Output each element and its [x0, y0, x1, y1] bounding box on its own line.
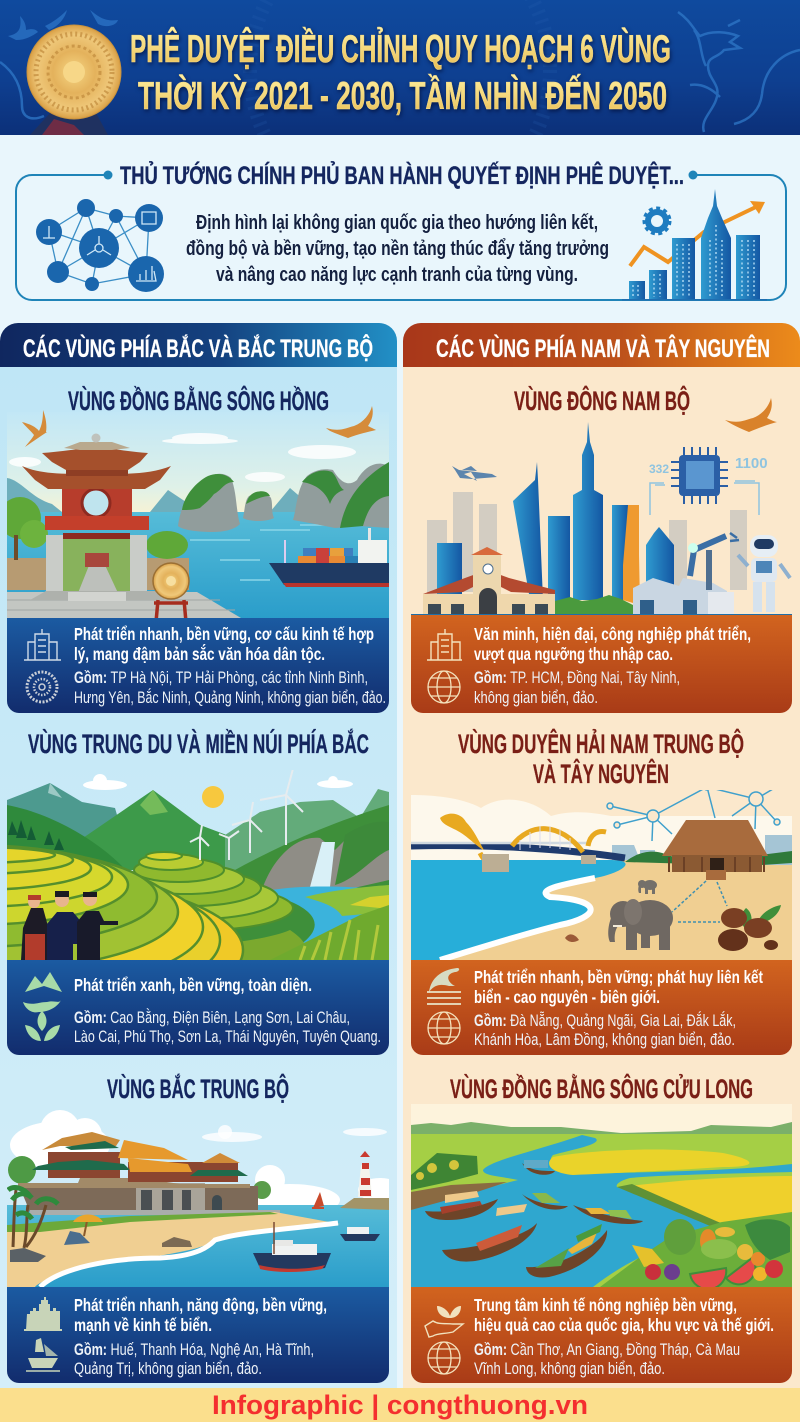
- intro text: Định hình lại không gian quốc gia theo hướng liên kết,: [196, 212, 598, 234]
- illustration: midlands: [7, 770, 389, 960]
- heading: Red River: VÙNG ĐỒNG BẰNG SÔNG HỒNG: [68, 385, 329, 416]
- icon: globe: [428, 671, 460, 703]
- text: [74, 1295, 327, 1378]
- rice terraces mound: [133, 851, 294, 930]
- illustration: Southeast city: [411, 422, 792, 616]
- info panel: Red River: [7, 618, 389, 713]
- icon: citadel: [24, 1297, 62, 1331]
- icon: leaves: [25, 1011, 60, 1041]
- info panel: north central: [7, 1287, 389, 1383]
- icon: bronze drum: [27, 25, 121, 135]
- text: lý, mang đậm bản sắc văn hóa dân tộc.: [74, 643, 325, 664]
- text: Hưng Yên, Bắc Ninh, Quảng Ninh, không gian biển, đảo.: [74, 688, 386, 707]
- illustration: Red River delta: [7, 428, 389, 618]
- factory: [633, 533, 739, 615]
- header banner: [0, 0, 800, 135]
- icon: birds: [22, 406, 376, 447]
- footer: [0, 1388, 800, 1422]
- boat large: [253, 1222, 331, 1272]
- icon: lighthouse ship: [26, 1338, 60, 1371]
- panel: intro: [16, 160, 786, 300]
- text: Quảng Trị, không gian biển, đảo.: [74, 1359, 262, 1378]
- icon: bird: [725, 398, 777, 432]
- heading: Southeast: VÙNG ĐÔNG NAM BỘ: [514, 385, 690, 416]
- stilt house: [662, 820, 768, 880]
- coffee beans: [718, 905, 781, 951]
- icon: microchip: 1100: [735, 455, 768, 472]
- boats: [425, 1163, 643, 1278]
- palm trees: [8, 1188, 58, 1248]
- icon: birds: [8, 10, 118, 40]
- heading: South Central: [458, 727, 744, 789]
- yellow field: [549, 1150, 749, 1175]
- icon: faint dragon: [0, 12, 800, 132]
- text: [474, 967, 763, 1049]
- icon: network: [36, 199, 164, 292]
- river: [411, 1135, 792, 1287]
- robot: [738, 535, 790, 612]
- bronze drum stand: [153, 563, 189, 622]
- illustration: north central: [7, 1110, 402, 1287]
- panel: southern column: [403, 323, 800, 1388]
- text: vượt qua ngưỡng thu nhập cao.: [474, 644, 673, 664]
- text: biển - cao nguyên - biên giới.: [474, 987, 660, 1007]
- column heading north: CÁC VÙNG PHÍA BẮC VÀ BẮC TRUNG BỘ: [23, 333, 373, 363]
- info panel: Mekong: [411, 1287, 792, 1383]
- title: [130, 27, 671, 118]
- icon: microchip: [649, 447, 768, 515]
- icon: wave: [427, 968, 461, 1004]
- info panel: Southeast: [411, 615, 792, 713]
- column heading south: [403, 323, 800, 367]
- golden field: [630, 1176, 792, 1224]
- icon: globe: [428, 1012, 460, 1044]
- text: Phát triển nhanh, năng động, bền vững,: [74, 1295, 327, 1315]
- icon: mountains hand: [23, 972, 62, 1012]
- temple gate: [0, 434, 189, 601]
- lighthouse: [340, 1151, 389, 1210]
- text: không gian biển, đảo.: [474, 688, 598, 707]
- text: Phát triển xanh, bền vững, toàn diện.: [74, 975, 312, 995]
- network lines: [606, 790, 781, 841]
- people: [21, 891, 118, 960]
- heading: South Central: VÀ TÂY NGUYÊN: [533, 758, 669, 789]
- info panel: midlands: [7, 960, 389, 1055]
- market building: [423, 547, 555, 615]
- icon: plant in hand: [425, 1306, 463, 1337]
- icon: globe: [428, 1342, 460, 1374]
- icon: city growth: [622, 189, 767, 300]
- text: [74, 975, 381, 1046]
- intro text: và nâng cao năng lực cạnh tranh của từng vùng.: [216, 264, 578, 286]
- illustration: Mekong delta: [411, 1104, 792, 1289]
- panel: northern column: [0, 323, 402, 1388]
- elephant small: [638, 880, 657, 894]
- beach umbrella: [64, 1214, 103, 1245]
- icon: microchip: 332: [649, 462, 669, 476]
- text: Phát triển nhanh, bền vững, cơ cấu kinh tế hợp: [74, 624, 374, 644]
- column heading north: [0, 323, 397, 367]
- heading: north central: VÙNG BẮC TRUNG BỘ: [107, 1073, 289, 1104]
- info panel: South Central: [411, 960, 792, 1055]
- citadel: [18, 1132, 258, 1212]
- boat small: [340, 1227, 380, 1241]
- text: [474, 1295, 774, 1378]
- footer: Infographic | congthuong.vn: [212, 1390, 588, 1420]
- limestone islands: [178, 462, 389, 532]
- text: Gồm: TP Hà Nội, TP Hải Phòng, các tỉnh Ninh Bình,: [74, 668, 368, 687]
- text: [474, 624, 751, 707]
- icon: buildings: [24, 629, 61, 660]
- cargo ship: [269, 528, 389, 587]
- intro text: đồng bộ và bền vững, tạo nền tảng thúc đẩy tăng trưởng: [186, 238, 609, 260]
- elephant large: [608, 899, 673, 950]
- heading: northern midlands: VÙNG TRUNG DU VÀ MIỀN NÚI PHÍA BẮC: [28, 728, 369, 759]
- icon: plane: [452, 466, 497, 481]
- text: Gồm: TP. HCM, Đồng Nai, Tây Ninh,: [474, 668, 680, 687]
- text: Vĩnh Long, không gian biển, đảo.: [474, 1359, 665, 1378]
- fruit pile: [600, 1212, 792, 1289]
- rice terraces left: [7, 845, 304, 960]
- text: mạnh về kinh tế biển.: [74, 1315, 212, 1335]
- text: Gồm: Huế, Thanh Hóa, Nghệ An, Hà Tĩnh,: [74, 1340, 314, 1359]
- text: Gồm: Cao Bằng, Điện Biên, Lạng Sơn, Lai Châu,: [74, 1008, 350, 1027]
- turbines: [190, 765, 303, 860]
- text: [74, 624, 386, 707]
- icon: bronze drum outline: [27, 672, 57, 702]
- illustration: South Central: [411, 783, 792, 960]
- intro text: [186, 212, 609, 286]
- dragon bridge: [411, 814, 625, 872]
- icon: buildings: [427, 629, 462, 660]
- text: Lào Cai, Phú Thọ, Sơn La, Thái Nguyên, Tuyên Quang.: [74, 1027, 381, 1046]
